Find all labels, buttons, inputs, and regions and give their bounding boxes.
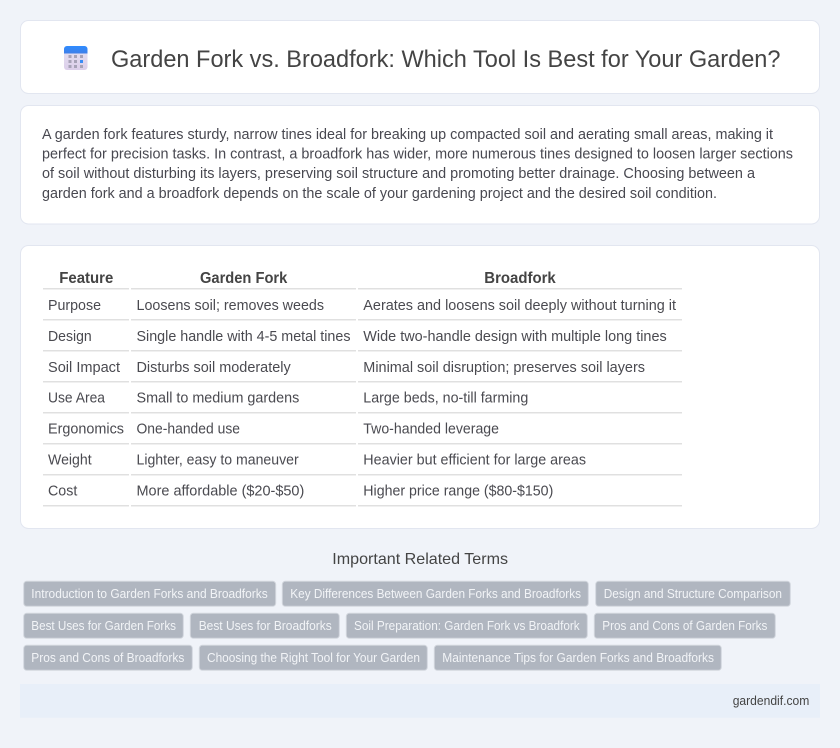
table row: design [43,329,682,352]
tag row 3: Maintenance Tips for Garden Forks and Broadforks [442,651,714,665]
table row: weight: Heavier but efficient for large areas [363,453,586,469]
table row: use area: Large beds, no-till farming [363,391,528,407]
title: Garden Fork vs. Broadfork: Which Tool Is Best for Your Garden? [111,46,780,73]
text block: introduction paragraph: perfect for precision tasks. In contrast, a broadfork has wider, more numerous tines designed to loosen larger sections [42,147,793,163]
table row: purpose: Purpose [48,298,101,314]
text block: introduction paragraph: A garden fork features sturdy, narrow tines ideal for breaking up compacted soil and aerating small areas, making it [42,127,773,143]
table row: cost: Cost [48,484,77,500]
table row: ergonomics: Two-handed leverage [363,422,499,438]
table row: cost: More affordable ($20-$50) [136,484,304,500]
panel: title header [20,20,820,94]
tag row 2: Soil Preparation: Garden Fork vs Broadfork [354,619,580,633]
footer site name: gardendif.com [733,694,809,708]
text block: introduction paragraph: garden fork and a broadfork depends on the scale of your gardening project and the desired soil condition. [42,186,717,202]
table header row: Feature [59,270,113,287]
tag row 1: Design and Structure Comparison [604,587,782,601]
panel: comparison table [20,246,820,528]
tag row 3: Pros and Cons of Broadforks [31,651,184,665]
table row: soil impact: Disturbs soil moderately [136,360,291,376]
table row: weight: Lighter, easy to maneuver [136,453,299,469]
tag row 2: Best Uses for Garden Forks [31,619,176,633]
table row: weight: Weight [48,453,92,469]
table row: design: Design [48,329,92,345]
table header row [43,270,682,290]
tag row 1: Introduction to Garden Forks and Broadforks [31,587,268,601]
tag row 2 [24,613,775,638]
icon: calendar [64,46,88,70]
tag row 3 [24,645,721,670]
table row: soil impact [43,360,682,382]
table row: use area [43,391,682,414]
table row: use area: Small to medium gardens [136,391,299,407]
table row: cost [43,484,682,506]
table row: cost: Higher price range ($80-$150) [363,484,553,500]
footer [20,684,820,718]
table header row: Garden Fork [200,270,287,287]
table row: purpose: Loosens soil; removes weeds [136,298,324,314]
text block: introduction paragraph: of soil without disturbing its layers, preserving soil structure and promoting better drainage. Choosing between a [42,166,756,182]
tag row 1: Key Differences Between Garden Forks and Broadforks [290,587,581,601]
table row: soil impact: Minimal soil disruption; preserves soil layers [363,360,645,376]
tag row 1 [24,581,790,606]
table row: ergonomics: Ergonomics [48,422,124,438]
table header row: Broadfork [484,270,556,287]
table row: ergonomics: One-handed use [136,422,240,438]
heading: important related terms: Important Related Terms [332,551,508,568]
table row: ergonomics [43,422,682,444]
table row: purpose: Aerates and loosens soil deeply without turning it [363,298,676,314]
table row: soil impact: Soil Impact [48,360,120,376]
table row: design: Single handle with 4-5 metal tines [136,329,350,345]
table row: purpose [43,298,682,320]
tag row 2: Pros and Cons of Garden Forks [602,619,767,633]
table row: use area: Use Area [48,391,106,407]
text block: introduction paragraph [42,127,793,202]
tag row 3: Choosing the Right Tool for Your Garden [207,651,420,665]
table row: weight [43,453,682,476]
panel: related term tags [24,581,790,670]
panel: introduction [20,106,820,224]
table row: design: Wide two-handle design with multiple long tines [363,329,667,345]
tag row 2: Best Uses for Broadforks [199,619,332,633]
